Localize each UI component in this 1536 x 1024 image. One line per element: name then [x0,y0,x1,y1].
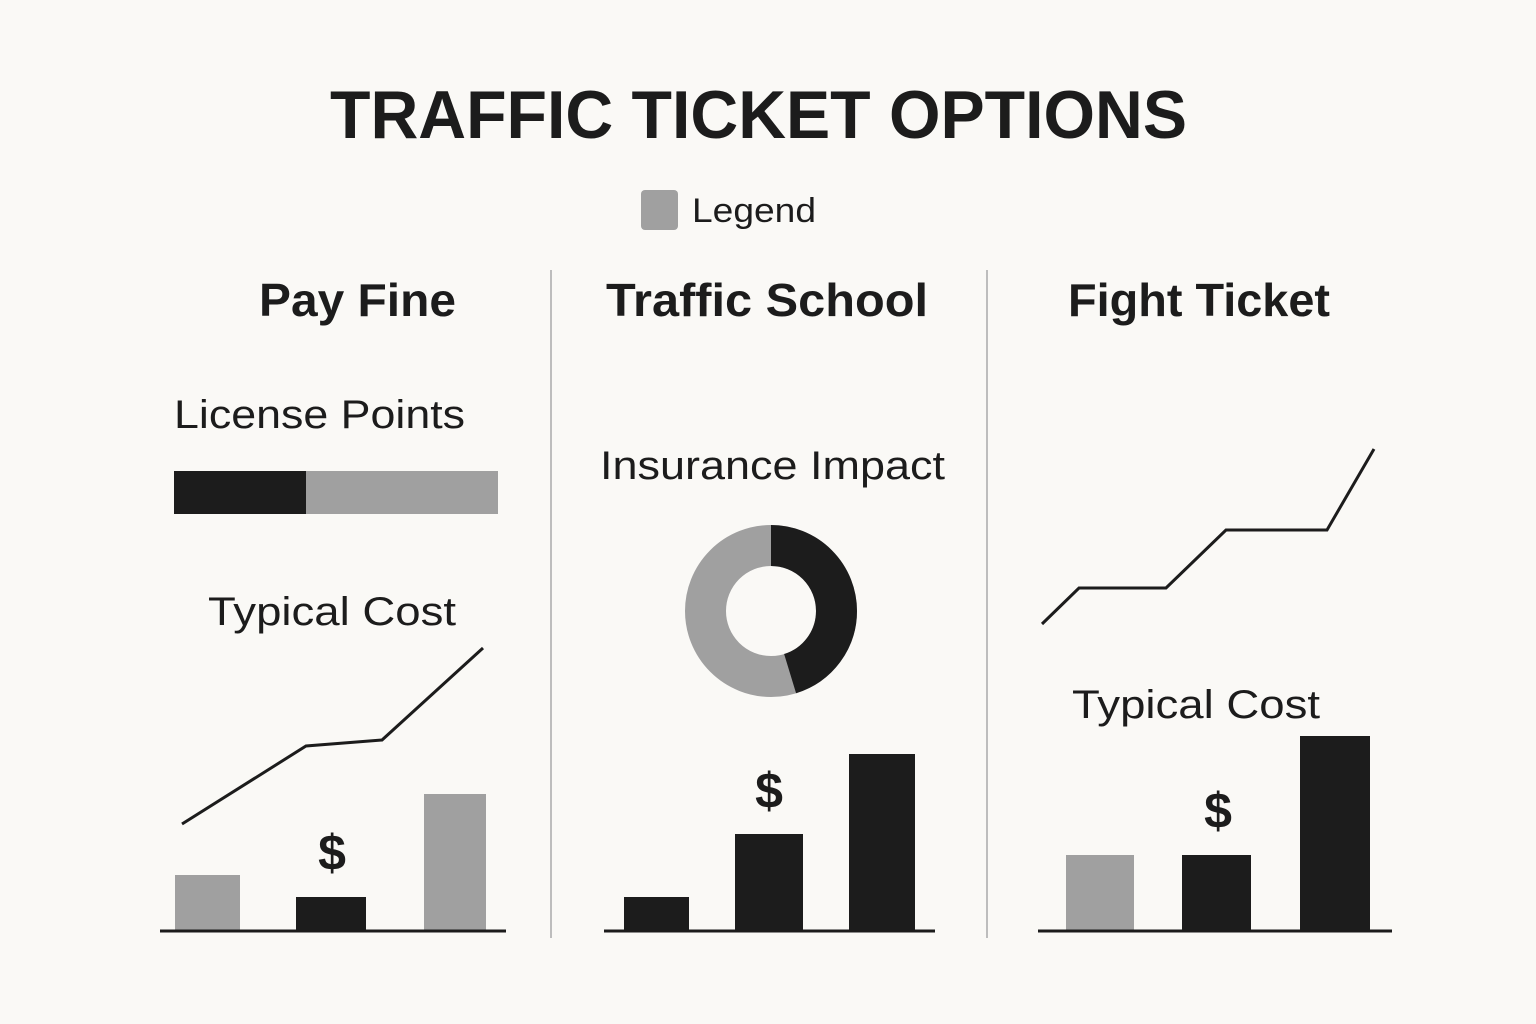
panel: pay fine [160,274,506,931]
legend [641,190,816,230]
bar chart: fight ticket [1038,736,1392,931]
panel: fight ticket [1038,274,1392,931]
legend: Legend [692,192,816,230]
title: TRAFFIC TICKET OPTIONS [330,77,1187,153]
line chart: pay fine [182,648,483,824]
heading: pay fine: Pay Fine [259,274,456,326]
label: license points: License Points [174,393,465,437]
icon: dollar: $ [1204,783,1232,839]
bar chart: traffic school [604,754,935,931]
panel: traffic school [600,274,945,931]
heading: fight ticket: Fight Ticket [1068,274,1330,326]
icon: dollar: $ [755,763,783,819]
donut chart [706,546,836,676]
heading: traffic school: Traffic School [606,274,928,326]
icon: dollar: $ [318,825,346,881]
label: typical cost: Typical Cost [1072,683,1320,727]
label: insurance impact: Insurance Impact [600,444,945,488]
bar chart: pay fine [160,794,506,931]
line chart: fight ticket [1042,449,1374,624]
progress bar: license points [174,471,498,514]
label: typical cost: Typical Cost [208,590,456,634]
